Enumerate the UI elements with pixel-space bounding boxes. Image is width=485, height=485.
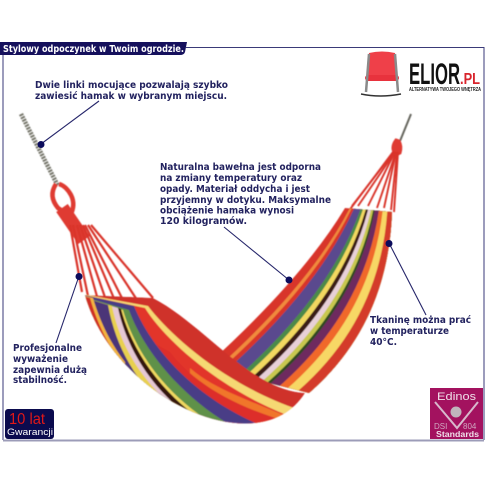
hammock back panel stripes [205, 208, 392, 393]
left steel rope [21, 114, 58, 186]
hammock front panel stripes [84, 294, 306, 424]
callout: balance: zapewnia dużą [13, 365, 87, 376]
callout: balance: Profesjonalne [13, 343, 82, 354]
badge: Edinos standards: Edinos [437, 391, 477, 403]
icon: red chair [361, 52, 401, 96]
badge: Edinos standards: 804 [463, 422, 477, 431]
callout: ropes: Dwie linki mocujące pozwalają szybko [35, 80, 228, 91]
badge: Edinos standards [430, 388, 483, 439]
callout: balance: stabilność. [13, 375, 67, 386]
right red rope loop [393, 140, 401, 155]
left rope fan [70, 225, 153, 310]
callout: cotton: Naturalna bawełna jest odporna [160, 162, 321, 173]
callout: balance: wyważenie [13, 354, 68, 365]
badge: 10 years warranty: Gwarancji [7, 427, 53, 437]
badge: Edinos standards: DSI [434, 422, 447, 431]
callout: ropes [35, 80, 228, 148]
left red rope loop and knot [52, 184, 84, 240]
hammock illustration [18, 112, 412, 424]
callout: washing: w temperaturze [370, 326, 449, 337]
callout: washing: Tkaninę można prać [370, 315, 471, 326]
callout: cotton: przyjemny w dotyku. Maksymalne [160, 195, 331, 206]
badge: 10 years warranty [5, 409, 54, 439]
header banner: Stylowy odpoczynek w Twoim ogrodzie. [3, 44, 184, 55]
badge: 10 years warranty: 10 lat [9, 411, 46, 428]
callout: cotton [160, 162, 331, 284]
callout: cotton: 120 kilogramów. [160, 216, 247, 227]
right rope fan [336, 152, 398, 228]
callout: washing: 40°C. [370, 337, 397, 348]
callout: cotton: obciążenie hamaka wynosi [160, 206, 294, 216]
logo: Elior: .PL [460, 71, 480, 88]
callout: ropes: zawiesić hamak w wybranym miejscu. [35, 91, 227, 102]
callout: washing [370, 240, 471, 348]
badge: Edinos standards: Standards [436, 430, 480, 439]
callout: cotton: na zmiany temperatury oraz [160, 173, 302, 184]
logo: Elior [361, 52, 481, 96]
callout: balance [13, 273, 87, 386]
callout: cotton: opady. Materiał oddycha i jest [160, 184, 310, 195]
right steel rope [400, 114, 411, 141]
